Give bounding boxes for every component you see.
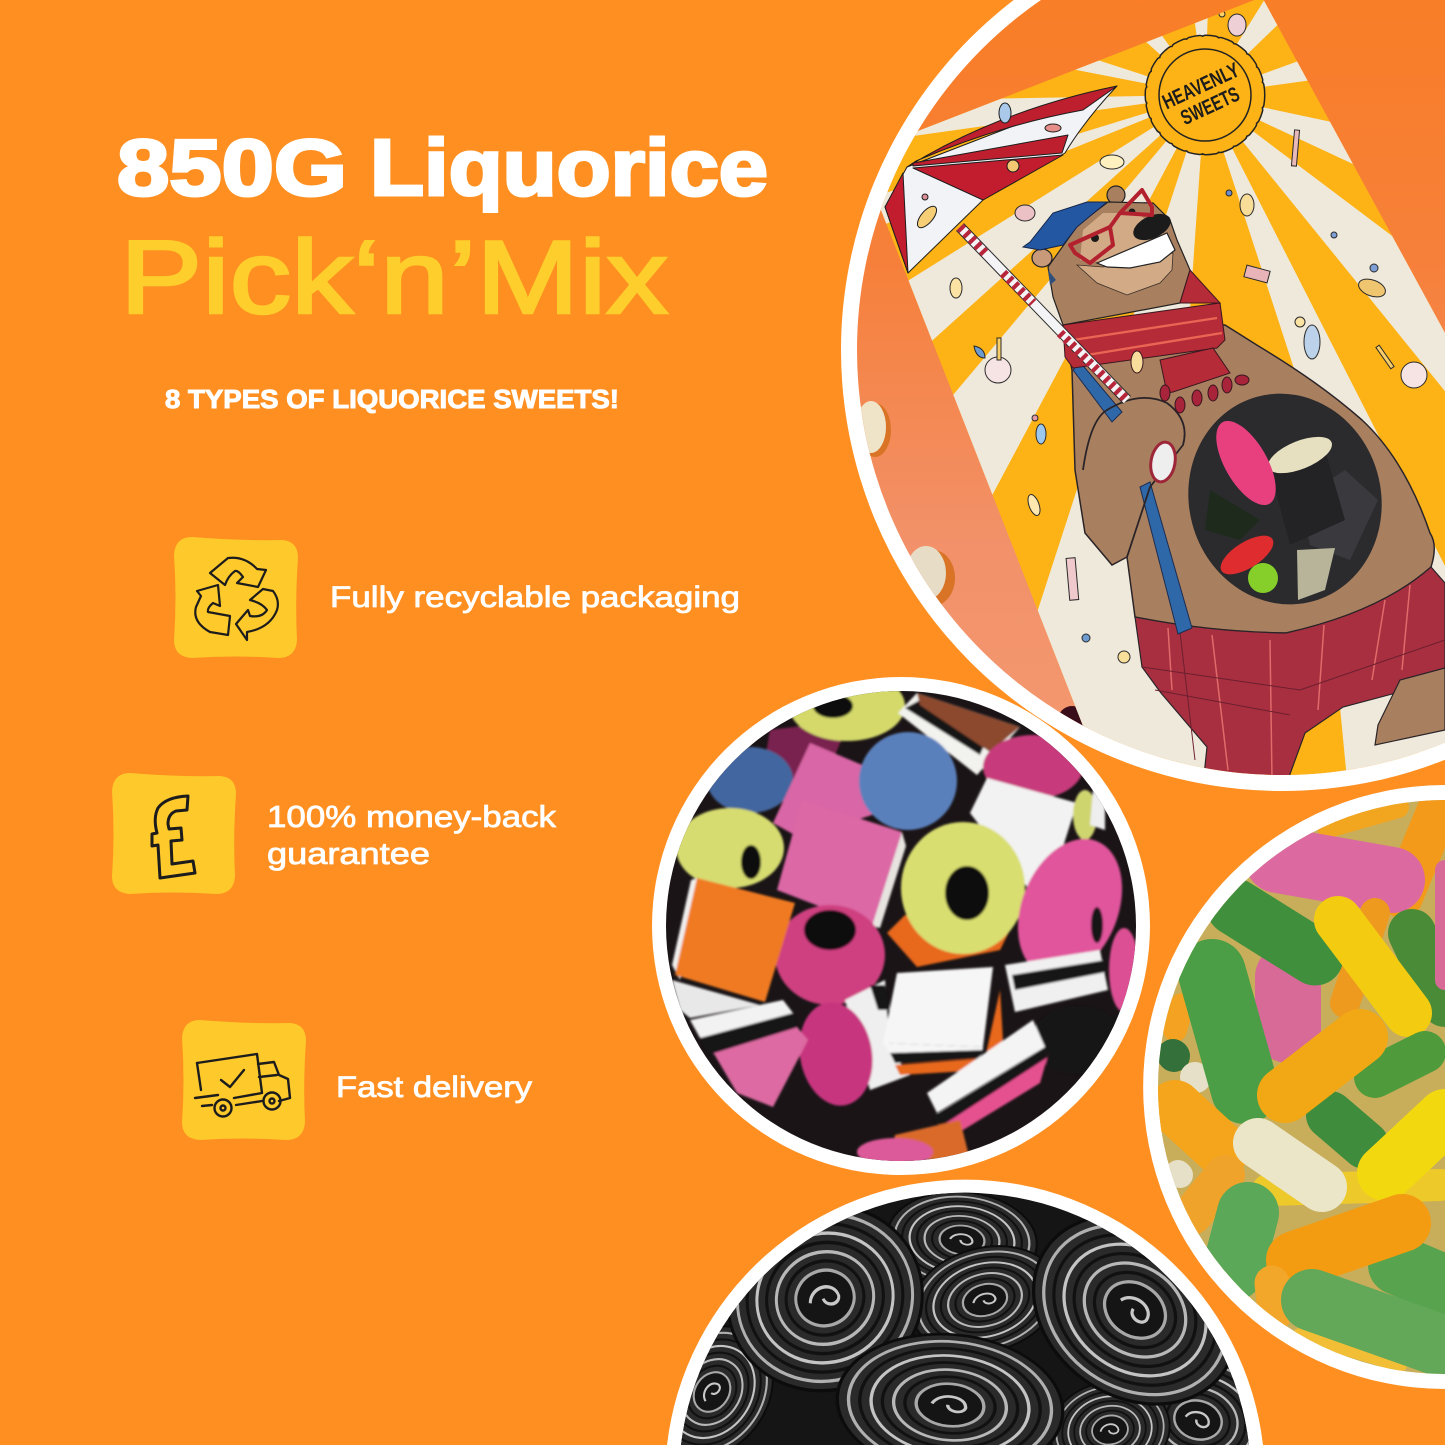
text: 100% money-back guarantee: 100% money-back (267, 799, 557, 834)
product box with sun rays (880, 0, 1445, 775)
subtitle: 8 TYPES OF LIQUORICE SWEETS! (165, 384, 619, 414)
text: 100% money-back guarantee: guarantee (267, 836, 430, 871)
title line: Pick'n'Mix: Pick‘n’Mix (120, 220, 668, 336)
brand badge: Heavenly Sweets: HEAVENLY (1159, 59, 1243, 114)
bear illustration (885, 86, 1445, 785)
title line: 850G Liquorice: Liquorice (370, 123, 768, 212)
shorts (1135, 567, 1445, 785)
photo circle: heavenly sweets box (841, 0, 1445, 791)
liquorice wheels (681, 1192, 1249, 1445)
brand badge: Heavenly Sweets (1150, 40, 1260, 150)
jelly beans (1173, 807, 1445, 1365)
bear head (1023, 186, 1190, 325)
candy cane in paw (1148, 440, 1178, 484)
text: 100% money-back guarantee (267, 799, 557, 871)
title (117, 123, 768, 336)
photo circle: jelly bean liquorice (1143, 785, 1445, 1390)
feature: fast delivery (182, 1020, 532, 1140)
title line: 850G Liquorice: 850G (117, 123, 347, 212)
suspender (1073, 362, 1192, 634)
photo circle: liquorice wheels (667, 1180, 1263, 1445)
text: fully recyclable packaging: Fully recyclable packaging (330, 581, 740, 614)
umbrella pole (960, 227, 1127, 400)
window into box with sweets (1188, 394, 1382, 604)
scattered sweets (950, 11, 1427, 663)
scarf (1063, 270, 1249, 413)
icon: delivery truck (182, 1020, 306, 1140)
icon: pound sign (112, 773, 236, 894)
brand badge: Heavenly Sweets: SWEETS (1177, 83, 1243, 130)
arm outline (1083, 398, 1185, 557)
text: fast delivery: Fast delivery (336, 1071, 532, 1104)
bear right leg (1375, 668, 1445, 745)
feature: money-back guarantee (112, 773, 557, 894)
allsorts sweets (672, 671, 1141, 1166)
umbrella (885, 86, 1117, 273)
bear body and arm (1063, 325, 1434, 633)
icon: recycling arrows (174, 537, 298, 658)
feature: recyclable packaging (174, 537, 740, 658)
photo circle: liquorice allsorts (650, 671, 1150, 1180)
title line: 850G Liquorice (117, 123, 768, 212)
